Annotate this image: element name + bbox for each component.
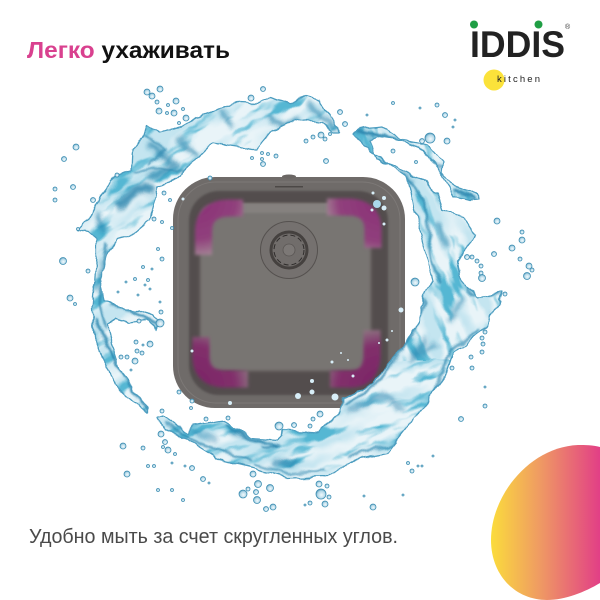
logo: IDDIS kitchen: ®	[565, 23, 571, 31]
logo: IDDIS kitchen: kitchen	[497, 74, 540, 85]
sink rim	[173, 177, 405, 408]
sink basin wall	[189, 191, 388, 395]
title: Легко ухаживать	[27, 37, 230, 63]
water droplets	[53, 86, 534, 512]
gradient blob	[491, 445, 600, 600]
sink basin floor	[200, 205, 371, 371]
logo: IDDIS kitchen: IDDIS	[470, 24, 565, 65]
logo: IDDIS kitchen	[470, 20, 571, 90]
caption: Удобно мыть за счет скругленных углов.	[29, 526, 398, 548]
overflow slot	[275, 186, 303, 188]
sink	[173, 174, 405, 408]
drain	[260, 222, 318, 278]
water splash: left arc	[76, 94, 340, 414]
rounded corner highlights	[201, 207, 373, 379]
water streaks: right arc	[165, 131, 500, 474]
water streaks: left arc	[96, 105, 335, 411]
droplets on sink	[182, 192, 404, 405]
water splash: right arc	[156, 126, 503, 480]
